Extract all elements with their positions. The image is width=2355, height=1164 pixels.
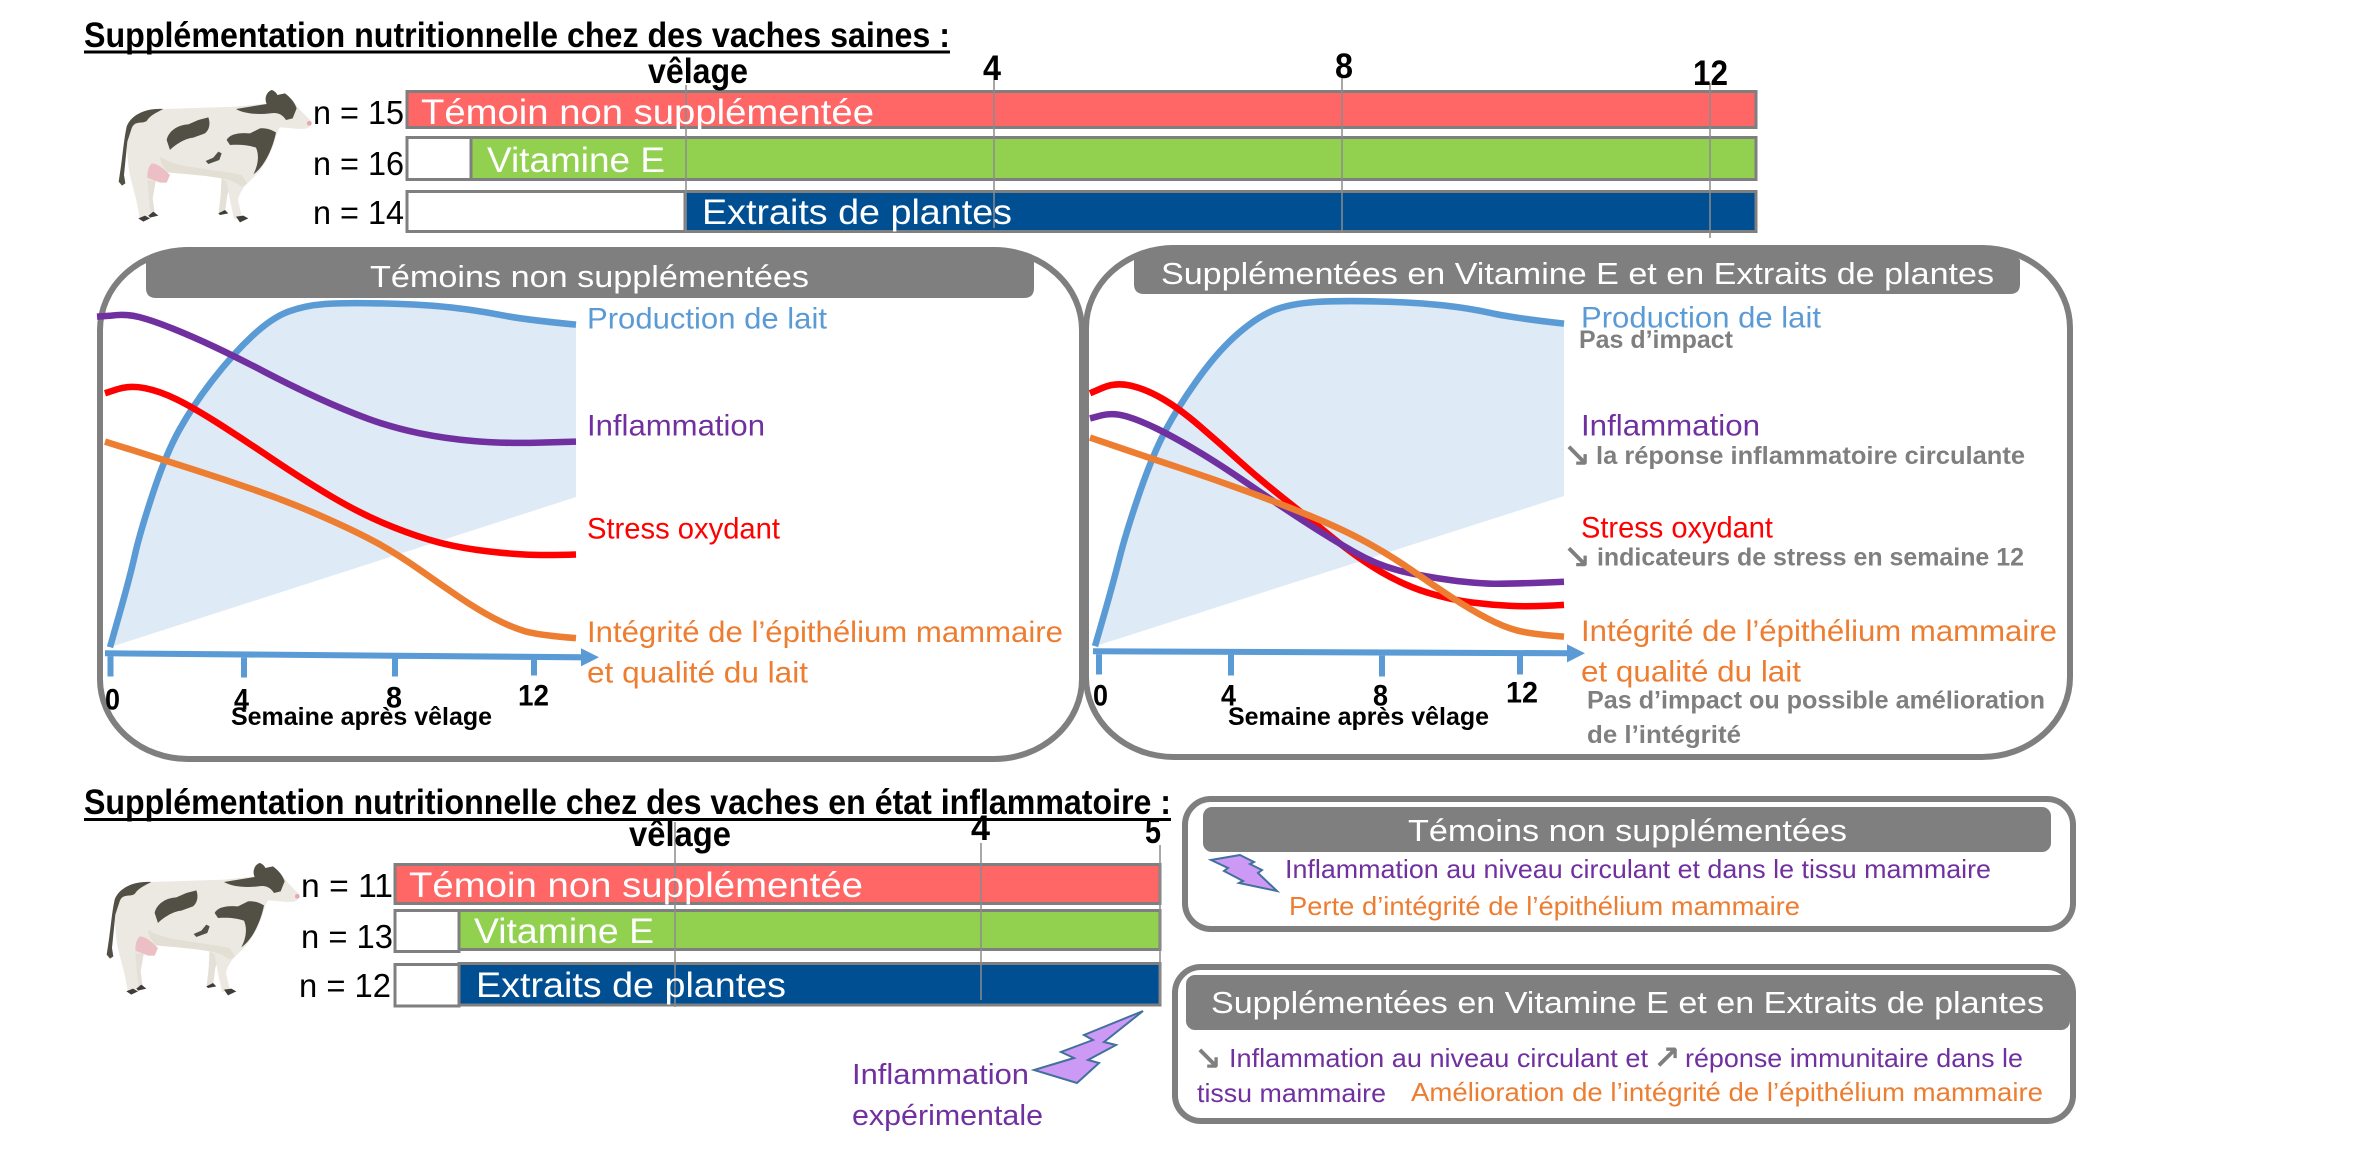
curve labels and effects: Production de lait xyxy=(1581,303,1821,335)
text: inflammation: Inflammation au niveau circulant et dans le tissu mammaire xyxy=(1285,854,1991,884)
curve labels and effects: Intégrité de l’épithélium mammaire xyxy=(1581,616,2057,648)
panel heading xyxy=(146,247,1034,298)
group sizes: n = 12 xyxy=(299,967,391,1004)
label: experimental inflammation: Inflammation xyxy=(852,1059,1029,1091)
panel heading: Supplémentées en Vitamine E et en Extraits de plantes xyxy=(1211,985,2044,1020)
curve labels and effects: Pas d’impact ou possible amélioration xyxy=(1587,687,2045,715)
curve labels and effects: la réponse inflammatoire circulante xyxy=(1596,442,2025,470)
bar labels: Extraits de plantes xyxy=(476,966,786,1005)
bar labels: Vitamine E xyxy=(487,141,665,180)
panel heading: Témoins non supplémentées xyxy=(1408,813,1847,848)
curve labels: et qualité du lait xyxy=(587,657,808,690)
text: effects: tissu mammaire xyxy=(1197,1078,1386,1108)
panel: supplemented cows chart xyxy=(1086,245,2070,757)
icon: cow xyxy=(119,90,312,222)
curve labels and effects: indicateurs de stress en semaine 12 xyxy=(1597,543,2024,572)
chart contents xyxy=(97,303,1063,731)
axis labels: 0 xyxy=(1093,681,1108,713)
curve labels and effects: Stress oxydant xyxy=(1581,512,1773,544)
bar labels xyxy=(421,93,1012,232)
bar labels: Témoin non supplémentée xyxy=(421,93,874,132)
week labels: 8 xyxy=(1335,47,1353,86)
curve labels and effects: Inflammation xyxy=(1581,410,1760,443)
icon: cow xyxy=(107,863,300,995)
bar labels: Témoin non supplémentée xyxy=(409,866,863,905)
label: experimental inflammation: expérimentale xyxy=(852,1100,1043,1132)
bar: vitamin E xyxy=(395,910,1160,952)
panel: control cows chart xyxy=(97,247,1082,759)
axis labels: Semaine après vêlage xyxy=(231,703,492,731)
bar labels: Vitamine E xyxy=(474,912,654,951)
timeline: inflamed cows xyxy=(299,809,1161,1007)
group sizes xyxy=(299,867,393,1004)
curve: epithelium integrity xyxy=(1090,438,1564,637)
panel: control cows summary xyxy=(1185,799,2073,929)
bar labels xyxy=(409,866,863,1005)
text: effects xyxy=(1194,1038,2043,1108)
bar: plant extracts xyxy=(395,964,1160,1006)
text: effects: réponse immunitaire dans le xyxy=(1685,1043,2023,1073)
panel: supplemented cows summary xyxy=(1175,967,2073,1121)
axis labels: 4 xyxy=(1221,681,1237,713)
axis labels: 8 xyxy=(386,683,402,715)
bar: plant extracts xyxy=(407,192,1756,232)
group sizes: n = 15 xyxy=(313,94,404,131)
text: effects: ↘ xyxy=(1194,1039,1222,1078)
arrow: time axis xyxy=(1093,644,1585,676)
curve: inflammation xyxy=(1090,414,1564,584)
axis labels: Semaine après vêlage xyxy=(1228,703,1489,731)
curve labels and effects: ↘ xyxy=(1563,537,1591,577)
week labels: 4 xyxy=(983,49,1001,88)
title: healthy cows: Supplémentation nutritionnelle chez des vaches saines : xyxy=(84,16,950,55)
curve: inflammation xyxy=(97,315,576,443)
axis labels: 12 xyxy=(1506,678,1538,710)
group sizes: n = 14 xyxy=(313,194,404,231)
icon: lightning, experimental inflammation xyxy=(1034,1011,1143,1083)
week labels xyxy=(648,47,1728,93)
curve labels and effects xyxy=(1563,303,2057,749)
axis labels xyxy=(1093,678,1538,731)
bar: control xyxy=(407,92,1756,128)
timeline: healthy cows xyxy=(313,47,1756,238)
curve labels and effects: Pas d’impact xyxy=(1579,326,1734,354)
group sizes xyxy=(313,94,404,231)
group sizes: n = 16 xyxy=(313,145,404,182)
area: milk production xyxy=(110,303,576,647)
axis labels xyxy=(105,681,549,731)
week labels: 12 xyxy=(1693,54,1728,93)
bar labels: Extraits de plantes xyxy=(702,193,1012,232)
text: effects: Amélioration de l’intégrité de l’épithélium mammaire xyxy=(1411,1077,2043,1107)
curve labels: Stress oxydant xyxy=(587,513,780,545)
group sizes: n = 13 xyxy=(301,918,393,955)
panel heading xyxy=(1186,975,2070,1030)
curve labels and effects: ↘ xyxy=(1563,436,1591,475)
curve: milk production xyxy=(1095,301,1564,646)
curve labels and effects: de l’intégrité xyxy=(1587,721,1741,749)
chart contents xyxy=(1090,301,2057,749)
panel heading: Supplémentées en Vitamine E et en Extraits de plantes xyxy=(1161,256,1994,291)
week labels: vêlage xyxy=(648,52,748,91)
panel heading xyxy=(1203,807,2051,852)
axis labels: 12 xyxy=(518,681,549,713)
curve labels and effects: et qualité du lait xyxy=(1581,656,1801,689)
week labels: vêlage xyxy=(629,815,731,854)
curve labels: Inflammation xyxy=(587,410,765,443)
curve labels xyxy=(587,304,1063,690)
text: effects: Inflammation au niveau circulant et xyxy=(1229,1043,1649,1073)
panel heading: Témoins non supplémentées xyxy=(370,259,809,294)
title: inflamed cows: Supplémentation nutritionnelle chez des vaches en état inflammatoire : xyxy=(84,783,1171,822)
curve: oxidative stress xyxy=(105,387,576,555)
axis labels: 0 xyxy=(105,685,120,717)
curve: epithelium integrity xyxy=(105,442,576,638)
curve labels: Production de lait xyxy=(587,304,827,336)
bar: vitamin E xyxy=(407,138,1756,180)
axis labels: 8 xyxy=(1373,681,1388,713)
text: integrity loss: Perte d’intégrité de l’épithélium mammaire xyxy=(1289,891,1800,921)
curve labels: Intégrité de l’épithélium mammaire xyxy=(587,617,1063,649)
axis labels: 4 xyxy=(234,685,250,717)
week labels xyxy=(629,809,1161,854)
area: milk production xyxy=(1095,301,1564,646)
week labels: 4 xyxy=(971,809,991,848)
label: experimental inflammation xyxy=(852,1059,1043,1132)
text: effects: ↗ xyxy=(1653,1038,1681,1077)
bar: control xyxy=(395,864,1160,904)
week labels: 5 xyxy=(1145,812,1161,851)
curve: oxidative stress xyxy=(1090,384,1564,606)
group sizes: n = 11 xyxy=(301,867,393,904)
arrow: time axis xyxy=(105,648,599,677)
curve: milk production xyxy=(110,303,576,647)
panel heading xyxy=(1134,245,2020,294)
icon: lightning xyxy=(1211,855,1277,891)
